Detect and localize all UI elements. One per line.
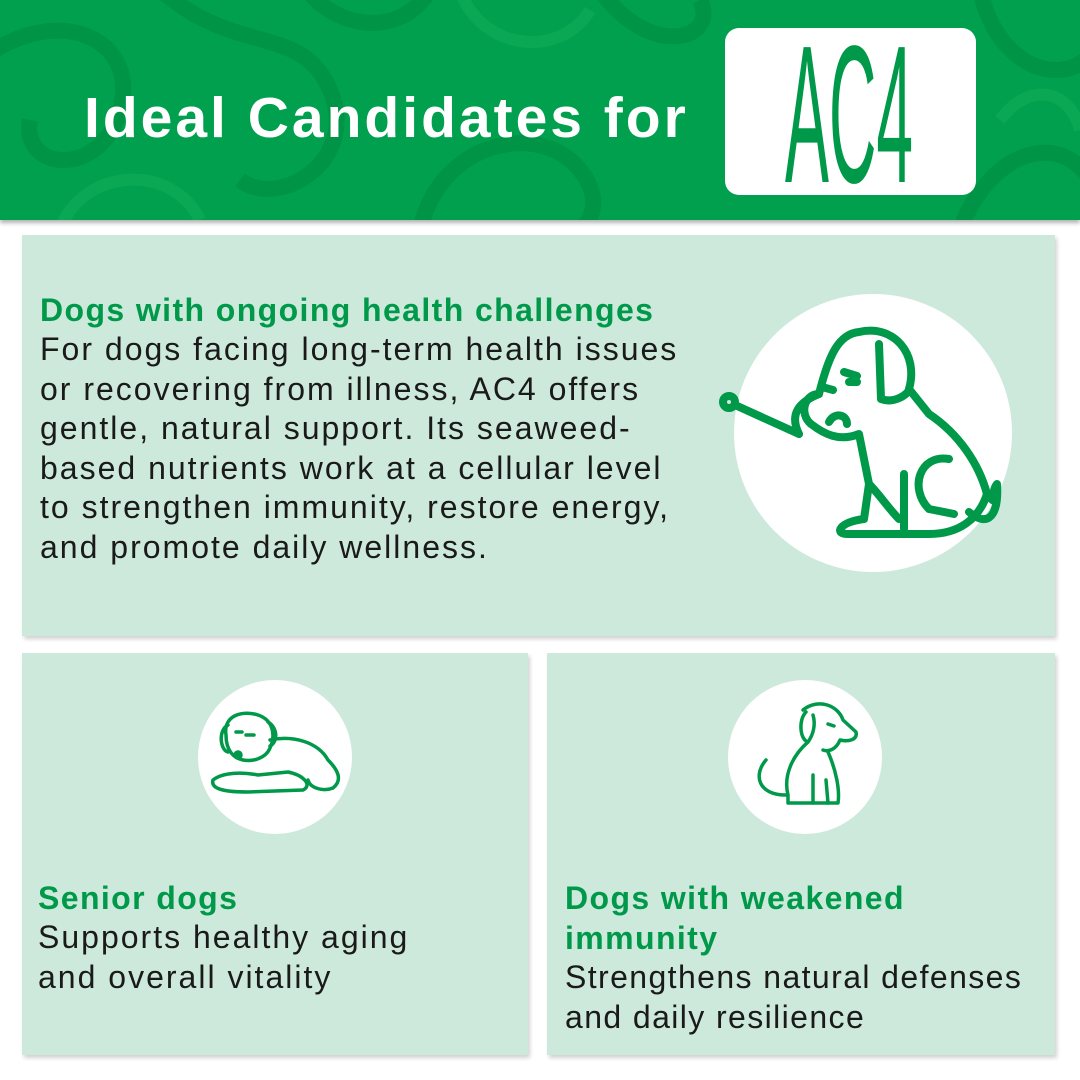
panel: ongoing health challenges <box>22 235 1055 636</box>
icon: senior dog lying <box>198 680 352 834</box>
heading: Dogs with weakened <box>565 880 905 916</box>
text block: to strengthen immunity, restore energy, <box>40 489 670 525</box>
header banner <box>0 0 1080 220</box>
text block: and daily resilience <box>565 999 865 1035</box>
text block: and promote daily wellness. <box>40 529 489 565</box>
title: Ideal Candidates for <box>84 86 689 150</box>
panel: weakened immunity <box>547 653 1055 1055</box>
icon: sitting dog <box>728 680 882 834</box>
text block: Strengthens natural defenses <box>565 959 1022 995</box>
panel: senior dogs <box>22 653 528 1055</box>
heading: Dogs with ongoing health challenges <box>40 292 654 328</box>
text block: Supports healthy aging <box>38 919 409 955</box>
heading: immunity <box>565 920 718 956</box>
text block <box>38 919 409 995</box>
text block: or recovering from illness, AC4 offers <box>40 371 640 407</box>
text block: gentle, natural support. Its seaweed- <box>40 410 632 446</box>
text block: based nutrients work at a cellular level <box>40 450 662 486</box>
icon: sick dog with thermometer <box>734 294 1012 572</box>
text block: and overall vitality <box>38 959 332 995</box>
text block <box>565 959 1022 1035</box>
heading <box>565 880 905 956</box>
text block: For dogs facing long-term health issues <box>40 331 678 367</box>
heading: Senior dogs <box>38 880 238 916</box>
text block <box>40 331 678 565</box>
